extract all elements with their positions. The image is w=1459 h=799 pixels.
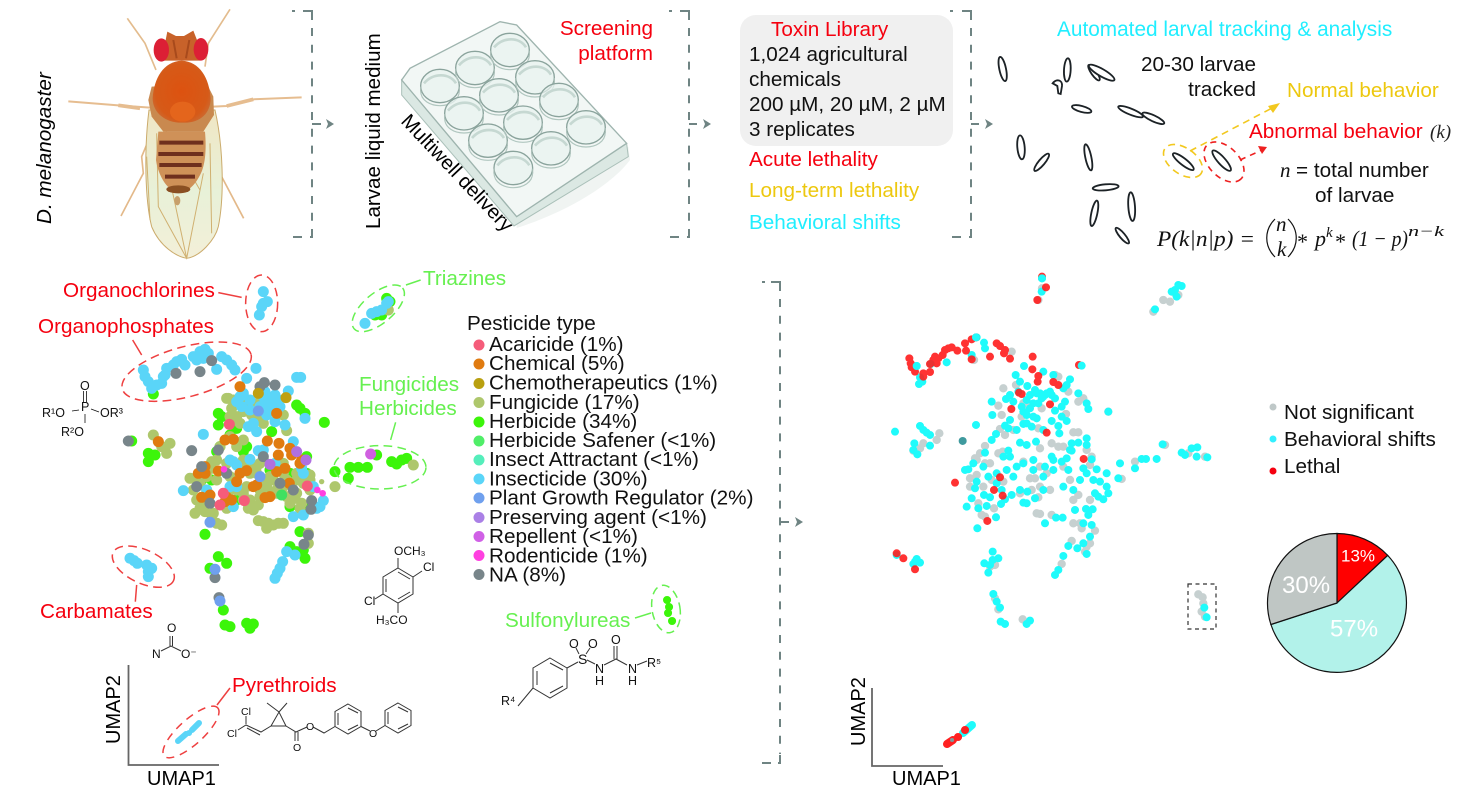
label: Organophosphates: Organophosphates (38, 315, 214, 338)
label: Carbamates: Carbamates (40, 600, 153, 623)
structure: sulfonylurea: N (595, 662, 604, 676)
structure: organophosphate: OR³ (100, 406, 123, 420)
structure: dimethoxy dichlorobenzene: Cl (423, 560, 434, 574)
structure: carbamate: N (152, 647, 161, 661)
normal larva highlight and arrow (1158, 103, 1280, 184)
right UMAP axes (872, 688, 943, 766)
structure: sulfonylurea: O (611, 633, 621, 647)
screening readouts: Behavioral shifts (749, 211, 901, 234)
label: n total number of larvae: of larvae (1315, 184, 1394, 207)
structure: sulfonylurea: S (578, 651, 587, 667)
pie chart: 13% (1341, 546, 1375, 566)
panel: toxin library box (740, 15, 953, 146)
structure: organophosphate: R²O (61, 425, 84, 439)
label: Pyrethroids: Pyrethroids (232, 674, 337, 697)
label: normal behavior: Normal behavior (1287, 79, 1439, 102)
formula: binomial probability: P(k|n|p) = (1156, 226, 1255, 251)
UMAP scatter colored by pesticide type (128, 292, 413, 628)
structure: pyrethroid: O (306, 721, 314, 733)
structure: organophosphate: R¹O (42, 406, 65, 420)
sulfonylureas callout (635, 583, 684, 635)
pyrethroids callout (156, 688, 230, 765)
label: 20-30 larvae tracked: 20-30 larvae (1141, 53, 1256, 76)
structure: sulfonylurea: O (569, 637, 579, 651)
structure: organophosphate: P (81, 400, 89, 414)
pesticide type legend: Rodenticide (1%) (489, 544, 648, 568)
bracket 3 with arrow (950, 11, 993, 237)
structure: sulfonylurea: O (588, 637, 598, 651)
phenotype legend (1270, 401, 1436, 478)
toxin library text: chemicals (749, 68, 841, 91)
structure: carbamate: O⁻ (181, 647, 197, 661)
sulfonylurea cluster dots (667, 600, 672, 621)
multiwell plate image (402, 22, 630, 228)
label: Triazines: Triazines (423, 267, 506, 290)
structure: carbamate: O (167, 621, 176, 635)
pesticide type legend: Insecticide (30%) (489, 468, 648, 490)
left UMAP axes (128, 665, 219, 765)
pesticide type legend: Chemotherapeutics (1%) (489, 372, 718, 394)
bracket 2 with arrow (669, 11, 711, 237)
phenotype legend: Behavioral shifts (1284, 428, 1436, 451)
label: Larvae liquid medium: Larvae liquid medium (362, 33, 385, 229)
UMAP scatter colored by phenotype (895, 277, 1207, 624)
pesticide type legend: Repellent (<1%) (489, 525, 638, 548)
formula: binomial probability (1156, 212, 1445, 261)
label: UMAP2 right: UMAP2 (848, 677, 870, 746)
phenotype legend: Not significant (1284, 401, 1414, 424)
pesticide type legend: Chemical (5%) (489, 352, 625, 375)
structure: dimethoxy dichlorobenzene: H₃CO (376, 613, 408, 627)
pesticide type legend: Herbicide Safener (<1%) (489, 429, 716, 452)
group callouts: red classes (106, 275, 278, 602)
pie chart: 57% (1330, 616, 1378, 642)
tracked larvae (997, 56, 1233, 245)
formula: binomial probability: n (1276, 212, 1286, 236)
structure: sulfonylurea: R⁴ (501, 694, 515, 708)
heading: automated tracking: Automated larval tracking & analysis (1057, 18, 1392, 41)
label: UMAP1 right: UMAP1 (892, 768, 961, 790)
abnormal larva highlight and arrow (1196, 134, 1267, 190)
structure: sulfonylurea: N (628, 662, 637, 676)
screening readouts: Long-term lethality (749, 179, 920, 202)
bracket 4 with arrow (762, 282, 803, 763)
structure: sulfonylurea: H (628, 674, 637, 688)
screening readouts: Acute lethality (749, 148, 878, 171)
dashed inset box (1188, 584, 1216, 629)
label: Organochlorines: Organochlorines (63, 279, 215, 302)
fly image: D. melanogaster (68, 9, 302, 258)
phenotype legend: Lethal (1284, 455, 1340, 478)
structure: sulfonylurea (501, 633, 661, 708)
label: abnormal behavior k: (k) (1430, 122, 1451, 143)
label: D. melanogaster: D. melanogaster (33, 71, 56, 224)
formula: binomial probability: * (1296, 229, 1307, 254)
structure: pyrethroid: Cl (227, 728, 237, 740)
formula: binomial probability: p (1313, 226, 1326, 251)
pie chart (1267, 533, 1406, 672)
label: n total number of larvae: = total number (1296, 159, 1429, 182)
toxin library text: 1,024 agricultural (749, 43, 908, 66)
group callouts: green classes (334, 276, 426, 489)
pesticide type legend (467, 312, 753, 586)
bracket 1 with arrow (292, 11, 334, 237)
toxin library text: Toxin Library (771, 18, 889, 41)
pesticide type legend: Herbicide (34%) (489, 410, 637, 433)
structure: pyrethroid: Cl (241, 706, 251, 718)
formula: binomial probability: (1 − p) (1352, 226, 1408, 251)
label: Fungicides Herbicides: Fungicides (359, 373, 459, 396)
label: Screening platform: Screening (560, 17, 653, 40)
label: n total number of larvae: n (1280, 158, 1290, 182)
formula: binomial probability: * (1334, 229, 1345, 254)
formula: binomial probability: n−k (1408, 224, 1445, 240)
label: 20-30 larvae tracked: tracked (1188, 78, 1256, 101)
pie chart: 30% (1282, 572, 1330, 599)
pesticide type legend: Preserving agent (<1%) (489, 506, 707, 529)
pesticide type legend: Acaricide (1%) (489, 333, 624, 356)
pesticide type legend: Plant Growth Regulator (2%) (489, 486, 753, 510)
pesticide type legend: Fungicide (17%) (489, 391, 640, 414)
structure: sulfonylurea: R⁵ (647, 656, 661, 670)
structure: organophosphate (42, 379, 123, 439)
pyrethroid cluster dots (178, 723, 199, 741)
label: Sulfonylureas: Sulfonylureas (505, 609, 630, 632)
phenotype tail cluster (947, 725, 972, 744)
structure: carbamate (152, 621, 197, 661)
structure: dimethoxy dichlorobenzene: OCH₃ (394, 544, 426, 558)
toxin library text: 3 replicates (749, 118, 855, 141)
label: UMAP1 left: UMAP1 (147, 768, 216, 790)
toxin library text: 200 µM, 20 µM, 2 µM (749, 93, 946, 116)
structure: pyrethroid: O (293, 742, 301, 754)
structure: organophosphate: O (80, 379, 90, 393)
pesticide type legend: NA (8%) (489, 564, 566, 586)
label: Fungicides Herbicides: Herbicides (359, 397, 457, 420)
formula: binomial probability: k (1326, 225, 1333, 241)
structure: dimethoxy dichlorobenzene (364, 544, 434, 627)
structure: sulfonylurea: H (595, 674, 604, 688)
label: Screening platform: platform (578, 42, 653, 65)
structure: pyrethroid (227, 703, 411, 754)
label: UMAP2 left: UMAP2 (103, 675, 125, 744)
structure: pyrethroid: O (369, 728, 377, 740)
label: abnormal behavior k: Abnormal behavior (1249, 120, 1423, 143)
formula: binomial probability: k (1277, 237, 1287, 261)
pesticide type legend: Pesticide type (467, 312, 596, 335)
label: Multiwell delivery: Multiwell delivery (396, 110, 518, 237)
structure: dimethoxy dichlorobenzene: Cl (364, 594, 375, 608)
pesticide type legend: Insect Attractant (<1%) (489, 448, 699, 471)
